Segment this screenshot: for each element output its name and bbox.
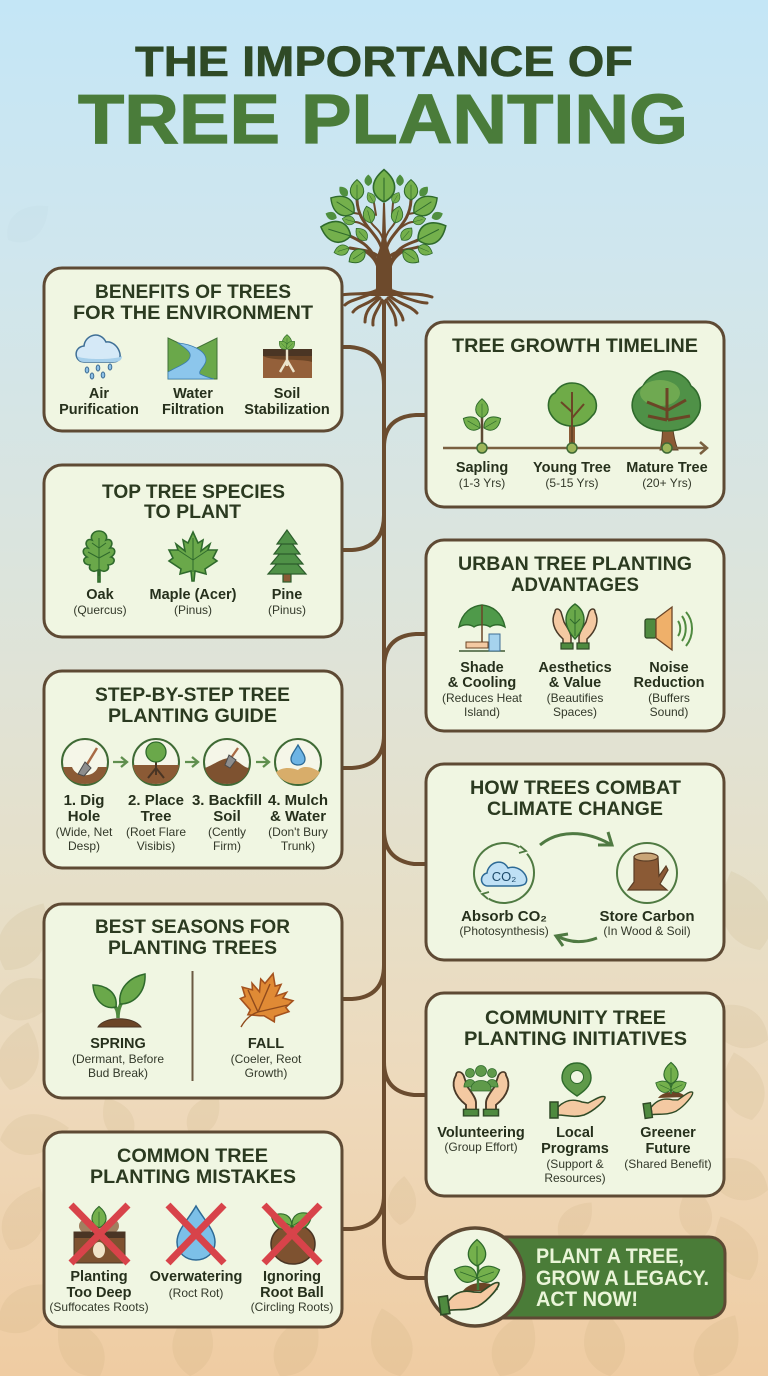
message: GROW A LEGACY.: [536, 1267, 709, 1290]
labels: (5-15 Yrs): [545, 476, 599, 490]
labels: Spaces): [553, 705, 597, 719]
heading: [470, 778, 681, 820]
icon: soil cross-section: [263, 335, 312, 378]
labels: Water: [173, 386, 213, 402]
panel: common mistakes: [44, 1132, 342, 1327]
panel: step-by-step guide: [44, 671, 342, 868]
labels: Shade: [460, 660, 504, 676]
heading: STEP-BY-STEP TREE: [95, 685, 290, 706]
panel: best seasons: [44, 904, 342, 1098]
heading: TREE GROWTH TIMELINE: [452, 336, 698, 357]
labels: (Group Effort): [444, 1140, 518, 1154]
icon: mulch and water: [275, 739, 321, 785]
heading: COMMON TREE: [117, 1146, 268, 1167]
heading: TO PLANT: [144, 502, 241, 523]
icon: sprout in hand: [642, 1062, 695, 1118]
heading: CLIMATE CHANGE: [487, 799, 663, 820]
icon: speaker: [645, 607, 692, 650]
labels: Firm): [213, 839, 241, 853]
heading: [95, 917, 290, 959]
labels: (Dermant, Before: [72, 1052, 164, 1066]
labels: 4. Mulch: [268, 792, 328, 809]
labels: (20+ Yrs): [642, 476, 692, 490]
labels: Purification: [59, 402, 139, 418]
timeline arrow: [443, 442, 707, 454]
icon: CO2 cycle: [462, 831, 546, 915]
labels: (1-3 Yrs): [459, 476, 505, 490]
labels: Desp): [68, 839, 100, 853]
heading: [458, 554, 692, 596]
icon: dig hole: [62, 739, 108, 785]
labels: Filtration: [162, 402, 224, 418]
labels: Planting: [70, 1269, 128, 1285]
arrow: bottom: [556, 934, 597, 946]
heading: [95, 685, 290, 727]
heading: ADVANTAGES: [511, 575, 639, 596]
labels: Stabilization: [244, 402, 330, 418]
labels: Pine: [272, 587, 302, 603]
labels: Noise: [649, 660, 689, 676]
labels: Hole: [68, 808, 100, 825]
heading: [102, 482, 285, 523]
icon: backfill: [204, 739, 250, 785]
labels: Visibis): [137, 839, 175, 853]
labels: 3. Backfill: [192, 792, 262, 809]
labels: (Shared Benefit): [624, 1157, 712, 1171]
labels: (Beautifies: [547, 691, 603, 705]
heading: BEST SEASONS FOR: [95, 917, 290, 938]
labels: Greener: [640, 1125, 696, 1141]
call to action: [426, 1228, 725, 1326]
heading: FOR THE ENVIRONMENT: [73, 303, 313, 324]
icon: planting too deep: [71, 1205, 128, 1263]
background leaf pattern: [0, 863, 768, 1376]
labels: (Support &: [546, 1157, 604, 1171]
labels: (Wide, Net: [56, 825, 113, 839]
labels: Air: [89, 386, 109, 402]
labels: & Cooling: [448, 675, 516, 691]
arrow: top: [540, 832, 612, 845]
labels: (In Wood & Soil): [603, 924, 691, 938]
icon: CO2 cycle: CO₂: [492, 869, 516, 884]
icon: spring sprout: [93, 974, 145, 1027]
divider: [192, 971, 194, 1081]
icon: ignoring root ball: [264, 1205, 320, 1264]
title: TREE PLANTING: [78, 80, 688, 158]
labels: Bud Break): [88, 1066, 148, 1080]
labels: Mature Tree: [626, 460, 708, 476]
labels: Trunk): [281, 839, 315, 853]
heading: COMMUNITY TREE: [485, 1008, 666, 1029]
labels: SPRING: [90, 1036, 146, 1052]
labels: Absorb CO₂: [461, 908, 547, 925]
heading: PLANTING TREES: [108, 938, 277, 959]
labels: (Photosynthesis): [459, 924, 549, 938]
labels: (Suffocates Roots): [49, 1300, 149, 1314]
labels: [73, 587, 306, 617]
heading: BENEFITS OF TREES: [95, 282, 291, 303]
trunk and connector branches: [342, 300, 426, 1278]
labels: & Value: [549, 675, 601, 691]
icon: river: [168, 338, 217, 379]
icon: mature tree: [632, 371, 700, 450]
labels: (Pinus): [174, 603, 212, 617]
labels: Soil: [274, 386, 300, 402]
title: [78, 38, 688, 158]
labels: (Don't Bury: [268, 825, 328, 839]
labels: Too Deep: [67, 1285, 132, 1301]
labels: [49, 1269, 333, 1314]
labels: Sapling: [456, 460, 508, 476]
icon: location pin in hand: [550, 1063, 605, 1118]
panel: benefits of trees: [44, 268, 342, 431]
icon: umbrella and bench: [459, 605, 505, 651]
labels: [442, 660, 704, 719]
heading: URBAN TREE PLANTING: [458, 554, 692, 575]
panel: growth timeline: [426, 322, 724, 507]
labels: (Roet Flare: [126, 825, 186, 839]
heading: [464, 1008, 687, 1050]
labels: Soil: [213, 808, 241, 825]
labels: [72, 1036, 302, 1080]
faint sky leaf: [0, 195, 58, 252]
arrow: [185, 757, 198, 767]
labels: [56, 792, 328, 853]
labels: Store Carbon: [599, 908, 695, 925]
labels: (Roct Rot): [169, 1286, 223, 1300]
labels: [459, 908, 695, 938]
icon: hand holding sprout: [426, 1228, 524, 1326]
icon: tree stump: [617, 843, 677, 903]
icon: hands with leaf: [553, 604, 597, 649]
heading: PLANTING INITIATIVES: [464, 1029, 687, 1050]
icon: maple leaf: [169, 532, 217, 581]
heading: [73, 282, 313, 324]
message: ACT NOW!: [536, 1288, 638, 1311]
labels: Reduction: [634, 675, 704, 691]
banner: [476, 1237, 725, 1318]
labels: Oak: [86, 587, 115, 603]
labels: Future: [645, 1141, 691, 1157]
labels: (Reduces Heat: [442, 691, 523, 705]
labels: FALL: [248, 1036, 284, 1052]
labels: Root Ball: [260, 1285, 324, 1301]
labels: 1. Dig: [64, 792, 104, 809]
message: [536, 1245, 709, 1311]
panel: community initiatives: [426, 993, 724, 1196]
labels: (Cently: [208, 825, 246, 839]
labels: & Water: [270, 808, 326, 825]
labels: (Quercus): [73, 603, 127, 617]
labels: (Circling Roots): [251, 1300, 333, 1314]
labels: [59, 386, 330, 418]
heading: [90, 1146, 296, 1188]
labels: Resources): [544, 1171, 606, 1185]
labels: Ignoring: [263, 1269, 321, 1285]
panel: climate change: [426, 764, 724, 960]
labels: Programs: [541, 1141, 609, 1157]
labels: Volunteering: [437, 1125, 525, 1141]
labels: [456, 460, 708, 490]
labels: Growth): [245, 1066, 287, 1080]
icon: volunteering hands: [454, 1066, 508, 1116]
icon: rain cloud: [76, 335, 122, 379]
icon: sapling: [460, 399, 504, 448]
icon: overwatering: [168, 1205, 224, 1263]
message: PLANT A TREE,: [536, 1245, 684, 1268]
labels: Aesthetics: [538, 660, 612, 676]
labels: Overwatering: [150, 1269, 242, 1285]
icon: pine: [268, 530, 306, 582]
labels: Local: [556, 1125, 594, 1141]
labels: [437, 1125, 712, 1185]
heading: PLANTING MISTAKES: [90, 1167, 296, 1188]
title: THE IMPORTANCE OF: [135, 38, 633, 86]
icon: fall maple leaf: [236, 967, 298, 1027]
labels: (Buffers: [648, 691, 690, 705]
icon: tree with roots: [318, 170, 450, 325]
labels: Sound): [650, 705, 688, 719]
icon: oak leaf: [83, 531, 115, 582]
heading: HOW TREES COMBAT: [470, 778, 681, 799]
heading: TOP TREE SPECIES: [102, 482, 285, 503]
icon: young tree: [548, 383, 596, 448]
heading: PLANTING GUIDE: [108, 706, 277, 727]
panel: urban advantages: [426, 540, 724, 731]
labels: (Coeler, Reot: [231, 1052, 302, 1066]
timeline markers: [477, 443, 672, 453]
labels: Tree: [141, 808, 171, 825]
labels: 2. Place: [128, 792, 184, 809]
labels: Young Tree: [533, 460, 611, 476]
arrow: [113, 757, 127, 767]
labels: Island): [464, 705, 500, 719]
arrow: [256, 757, 269, 767]
icon: place tree: [133, 739, 179, 785]
labels: (Pinus): [268, 603, 306, 617]
labels: Maple (Acer): [149, 587, 237, 603]
panel: top tree species: [44, 465, 342, 637]
